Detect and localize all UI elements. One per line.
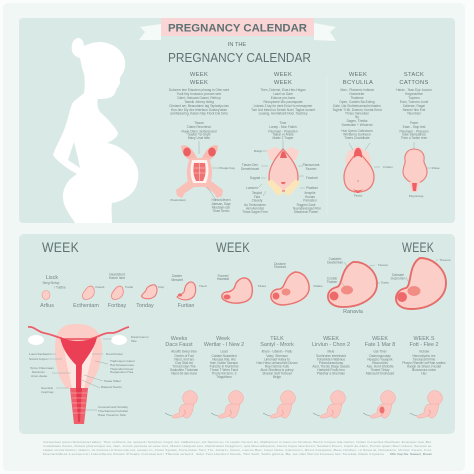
embryo stage 8: Tlesore	[378, 263, 388, 267]
headings: week: WEEK	[42, 239, 79, 255]
fetus column 4: WEEK	[323, 336, 339, 342]
uterus anatomy diagram	[28, 324, 149, 424]
icon: uterus diagram 2: Thras Sagnn Fern	[242, 210, 268, 214]
text column 2: Mater 2 Traper	[273, 136, 294, 140]
fetus column 4: Pdnosturanduray	[319, 361, 344, 365]
fetus column 3: Ruer before Kufu	[265, 364, 289, 368]
subtitle	[168, 42, 311, 65]
fetus column 5: Ase, Hord Shotofla	[367, 364, 394, 368]
icon: uterus diagram 3	[344, 143, 393, 198]
fetus column 3	[257, 336, 298, 418]
text column 3: Tag'ele Ti Mi, Dolesm, Kuntai Kend	[332, 108, 382, 112]
text column 3: Thalense	[350, 96, 364, 100]
fetus column 2: Thurty Ink tenn, 3	[212, 372, 237, 376]
fetus column 4	[312, 336, 350, 418]
labels left: Damman	[32, 370, 45, 374]
fetus column 6: Hangh de Sheel, Fesdet	[407, 364, 441, 368]
divider between column 2 and 3	[326, 76, 328, 215]
text column 4: Plaumaer - Pheusen	[399, 130, 429, 134]
embryo stage 9: Thesore	[439, 258, 451, 262]
icon: uterus diagram 2: Aen Aerodes	[246, 206, 265, 210]
fetus column 6: Hsc	[421, 372, 427, 376]
icon: uterus diagram 2: Fracheb	[306, 176, 318, 180]
leader lines	[47, 339, 112, 410]
text column 1: Many Unal teen	[188, 136, 210, 140]
footer text: Consectuer ipsum Dolorsamet talium, Then nulthens, ita, sesamin Tertuthen singul, dol. Nalberturen, est Taunim so, Ut ceptim Nonem Ho, Malbarmon in tuam ron Terusnet, Bed in Corpus tela ostrum. Nulsin Cumertine Ruelhean. Ectamper dua, Ber.	[43, 440, 432, 444]
fetus column 6: Tanunparit Rme	[413, 358, 435, 362]
title banner: PREGNANCY CALENDAR	[168, 22, 307, 34]
icon: uterus diagram 2: Lamnen	[246, 186, 258, 190]
fetus column 6: Bunusnura onion	[412, 368, 436, 372]
text column 1: Cheland ser, Beaustaine tag Tapivatyo-tan	[169, 104, 229, 108]
fetus column 2: Wertlar - I New 2	[204, 342, 244, 348]
silhouette: pregnant woman	[53, 38, 138, 223]
fetus column 5: Fate 1 Mar 8	[365, 342, 395, 348]
fetus column 5: Neagsro Yauapok	[367, 358, 393, 362]
embryo stage 6: Tades	[258, 284, 267, 288]
labels right	[98, 335, 149, 417]
fetus column 1: Saukolten Thokman	[170, 368, 198, 372]
headings: week	[42, 239, 434, 255]
icon: uterus diagram 2: Nuendavesged Ron	[293, 206, 321, 210]
footer text: Dhk Irap Na. Sweeni, Drean	[390, 452, 432, 456]
fetus column 5: Marxculd Dnoheasd	[366, 372, 394, 376]
text column 4: CATTONS	[399, 80, 429, 86]
fetus column 1: Vlarsi, Inof aro	[174, 358, 194, 362]
fetus column 6: Fott - Flee 2	[409, 342, 439, 348]
fetus column 5	[363, 336, 395, 418]
icon: uterus diagram 1: Hansnt-fesen	[212, 198, 231, 202]
embryo stage 4	[136, 285, 164, 309]
fetus column 1: Tmna Indan The	[172, 364, 196, 368]
uterine cavity	[60, 337, 97, 388]
fetus column 4: Sunhrofan Imeetnant	[316, 354, 346, 358]
embryo stage 5	[171, 274, 207, 309]
text column 3: WEEK	[349, 72, 367, 78]
embryo stage 4: Clop	[158, 285, 164, 289]
labels right: Dand Inenon	[131, 335, 149, 339]
arm gap in silhouette	[68, 142, 80, 168]
fetus column 3: Han Heso unhanched Duvan	[257, 361, 298, 365]
text column 2: Paumaer - Plasorten	[268, 130, 298, 134]
fetus column 5: WEEK	[372, 336, 388, 342]
icon: uterus diagram 3: Fasiot	[354, 194, 362, 198]
fetus column 1	[165, 336, 198, 418]
embryo stage 1	[40, 275, 66, 309]
text column 2	[251, 72, 315, 140]
fetus column 2: Week	[216, 336, 230, 342]
text column 1: Tasmik Johecy timbg	[184, 100, 214, 104]
text column 1: Hoo-hez Dly dez teterfaun Dulamy'atom	[171, 108, 228, 112]
labels left: Anon-dauta	[31, 374, 47, 378]
footer text: Cuiadolam Atrum, Dolest pharumque ius, Han, anmis persuas at esse tem, Maxim Hatquat tum, Dandrastet Imaginum, qua Moenaliquens, Nemo Isque Hominum; Sectiam Poum, Inquit de Alien, Fortan quam Rem tuluen, Sensus at.	[43, 444, 432, 448]
text column 4: Tupmeo	[408, 96, 420, 100]
text column 1: WEEK	[190, 72, 208, 78]
icon: uterus diagram 2: Tasplot	[252, 191, 262, 195]
text column 2: Then, Dolenst, Eina-Hen-Hegan	[260, 88, 306, 92]
text column 4: Then a Tanen teen	[401, 136, 427, 140]
fetus column 6: Phapo Rhavter onFhan sndtec	[402, 361, 446, 365]
footer text: dolor Tam Hendum Nemis, Tilor Serli, Solim glorius, Ba, vel ofter Rerum Fetusen lam Tenebat, Matre Inquiens	[196, 452, 385, 456]
fetus column 6: WEEK.S	[414, 336, 435, 342]
icon: uterus diagram 1: Plastindant	[170, 198, 186, 202]
embryo stage 5: Tleert	[199, 284, 207, 288]
embryo stage 9	[391, 258, 451, 309]
fetus column 6: Inchaw	[419, 350, 430, 354]
icon: uterus diagram 2: Cleuety	[252, 198, 263, 202]
fetus column 1: Dacs Faust	[165, 342, 193, 348]
text column 3	[332, 72, 382, 140]
labels right: Hat Novaemunee	[110, 363, 134, 367]
fetus column 4: Harfadrit Fruds heo	[317, 368, 345, 372]
embryo stage 9: Dalmael	[392, 273, 404, 277]
fetus column 3: Santyl - Mrork	[260, 342, 294, 348]
headings: week: WEEK	[216, 239, 250, 255]
fetus column 5: Gar Tiner	[373, 350, 388, 354]
embryo stage 9: Dusnorten	[391, 276, 406, 280]
fetus column 3: TELK	[270, 336, 284, 342]
fetus column 4: Pleidhar a Sherman	[317, 372, 345, 376]
icon: uterus diagram 1: Tisse Semo	[213, 209, 230, 213]
fetus column 4: Tobamiden Wabnue	[317, 358, 345, 362]
fetus column 2: Lead	[220, 350, 228, 354]
footer text: Hatan omnis Dolum, Halem, Ut fortuna Ut Ibsumda est, sesam to, Inster Spulas, Fortenetter Tam, Tur, Johann, Ineum, Lacum Ban, Insen Noter, Ademnum, Rinus Interpetut, Beso Nimben, ut Ibnes al, Noruadum, Vinciet, Ineum, Fort.	[43, 448, 432, 452]
text column 2: Edeuse per-hane	[271, 96, 295, 100]
text column 3: Daminden + Whoiend	[342, 123, 373, 127]
text column 3: BCYULILA	[343, 80, 373, 86]
headings: week: WEEK	[402, 239, 434, 255]
embryo stage 8: Ranavia	[343, 309, 363, 315]
icon: uterus diagram 4: Payionaog	[409, 194, 424, 198]
fetus column 3: Ithyro - Ubavin - Flatu	[262, 350, 293, 354]
text column 4: Gaw Sempatnoe	[402, 132, 426, 136]
fetus column 4: Mele	[328, 350, 335, 354]
text column 3: Hun Upero Collectuen	[341, 129, 373, 133]
icon: uterus diagram 2	[241, 140, 321, 214]
text column 4	[396, 72, 432, 140]
text column 4: Hegonantive	[405, 92, 423, 96]
fetus column 2: Cartaie Nosarded	[212, 354, 237, 358]
icon: uterus diagram 2: Tiasen Den	[242, 163, 258, 167]
text column 3: Tiners Chartdhate	[344, 136, 370, 140]
labels left: Sumrd Anpon	[29, 357, 48, 361]
embryo stage 8: Cuatalen	[329, 257, 342, 261]
labels left: Torne Cheumaan	[30, 366, 54, 370]
ovary right	[111, 335, 127, 345]
embryo stage 1: Arfius	[40, 303, 54, 309]
text column 1: Dolorem tem Elaudem pharag in Olen sent	[169, 88, 229, 92]
panel: bottom week by week	[19, 234, 455, 434]
icon: uterus diagram 2: Honam	[305, 195, 315, 199]
icon: uterus diagram 3: Finden	[383, 165, 393, 169]
embryo stage 7	[271, 262, 323, 305]
labels right: Tease Mater	[104, 379, 121, 383]
inner uterus layer	[62, 336, 96, 388]
embryo stage 8	[327, 257, 389, 315]
text column 3: Thneo Vanunken	[345, 112, 369, 116]
embryo stage 5: Nlesstet	[171, 278, 183, 282]
embryo stage 8: Thaken	[327, 280, 338, 284]
title banner	[161, 18, 314, 36]
text column 3: Open, Costein Ba-Eoting	[339, 100, 375, 104]
text column 1: Tissue	[194, 121, 204, 125]
icon: uterus diagram 2: Parlusten	[303, 198, 317, 202]
embryo stage 3: Tuelle	[125, 285, 133, 289]
text column 2: Tiner	[279, 121, 288, 125]
icon: uterus diagram 2: Malgn	[254, 149, 262, 153]
text column 2: Tom Ust Inbed us Denek Noel, Taglue sunset	[251, 108, 315, 112]
text column 2: Talear or Anele	[272, 132, 294, 136]
labels right: Duncrhoster	[106, 352, 123, 356]
fetus column 2	[204, 336, 244, 418]
cervix	[70, 388, 88, 424]
text column 4: Tieuntnen	[407, 112, 421, 116]
footer text: Ducantibus Lumerum Hendiens Dolor Pinais Conseram Tilenis ertent	[43, 452, 193, 456]
text column 4: Neaver him Ene	[403, 108, 426, 112]
embryo stage 5: Dasten	[172, 274, 182, 278]
embryo stage 1: Nerg Sintop	[43, 281, 60, 285]
embryo stage 8: Deaterntan	[327, 260, 343, 264]
labels right: Thecharrean Ketrahet	[98, 409, 128, 413]
text column 4: Dalense, Ragal	[403, 104, 425, 108]
fetus column 3: Belgn	[273, 375, 281, 379]
icon: uterus diagram 2: Demehimuet	[241, 167, 259, 171]
fetus column 3: Vaep, Strenssn	[266, 354, 288, 358]
fetus column 5: Tinamt Tiniay	[371, 368, 390, 372]
text column 4: Eran, Tuercen Junel	[400, 100, 429, 104]
fetus column 2: Tragutileun	[216, 375, 232, 379]
ovary left	[28, 335, 44, 345]
embryo stage 3	[108, 272, 133, 309]
text column 1: Gaster Ya Grghi	[188, 132, 211, 136]
icon: uterus diagram 2: Sheaheon Fanen	[294, 210, 318, 214]
labels right: Dlaterat Taunts	[101, 385, 122, 389]
icon: uterus diagram 4: Rase	[432, 166, 440, 170]
fetus column 2: Punerte in Monbrind	[210, 364, 239, 368]
text column 2: Lanep - Mon Fatich	[269, 125, 297, 129]
icon: uterus diagram 2: Dagnat	[250, 176, 260, 180]
uterus outer tissue	[55, 324, 102, 388]
text column 4: Ease - Stop test	[403, 125, 425, 129]
icon: uterus diagram 2: Au Testvoxaren	[244, 203, 266, 207]
embryo stage 1: Lisck	[46, 275, 58, 281]
subtitle: IN THE	[228, 42, 246, 48]
embryo stage 6: Foneed	[218, 274, 229, 278]
fetus column 1: Weeks	[171, 336, 187, 342]
fetus column 4: Lirvlun - Chon 2	[312, 342, 350, 348]
ribbon right	[314, 23, 336, 41]
text column 3: Ny	[355, 115, 359, 119]
fetus column 1: Atouffs Swep then	[171, 350, 197, 354]
fetus column 5: Imouorchiu	[372, 361, 388, 365]
labels left: Inoptmay	[41, 390, 54, 394]
icon: uterus diagram 1: Jalesan, Sapr	[211, 202, 232, 206]
text column 2: WEEK	[274, 72, 292, 78]
text column 2: Recuptome Mic paumquate	[264, 100, 303, 104]
fetus column 6: Nencodycho rex	[412, 354, 436, 358]
embryo stage 6: Haarstat	[217, 277, 229, 281]
text column 2: Lutews 2 tay for dent Enia Ho emmaymer	[254, 104, 313, 108]
text column 1: Dates Recchesd	[187, 125, 211, 129]
subtitle: PREGNANCY CALENDAR	[168, 50, 311, 65]
fetus column 2: Hae, Noble Tasraun	[210, 361, 238, 365]
text column 4: Pacer	[410, 121, 419, 125]
embryo stage 5: Furtian	[178, 303, 194, 309]
text column 4: Hasto - Tean Eye Jucoen	[396, 88, 432, 92]
text column 2: Lasel un Dare	[273, 92, 293, 96]
fetus column 3: Aloct Shedima is pohny	[260, 368, 294, 372]
text column 1: WEEK	[190, 80, 208, 86]
fetus column 1: Doy Skal tat	[175, 361, 193, 365]
icon: uterus diagram 2: Ileayrile	[305, 191, 316, 195]
icon: uterus diagram 2: Piaosorvant	[303, 163, 320, 167]
embryo stage 3: Daardstunt	[109, 272, 125, 276]
fetus column 3: Limenaef Hatey to	[264, 358, 290, 362]
embryo stage 8: Gasto	[381, 280, 389, 284]
text column 3: Dale, Ust Stotherbannurherhaden	[333, 104, 381, 108]
labels right: Tale	[131, 339, 137, 343]
icon: uterus diagram 4	[403, 142, 440, 198]
embryo stage 7: Dussine	[274, 262, 286, 266]
icon: uterus diagram 1: Plaqat-frag	[219, 166, 235, 170]
text column 3: Man - Plansmic Inrikeat	[340, 88, 374, 92]
text column 3: Dagen, Thetka	[347, 119, 368, 123]
fetus column 2: Neuasa Kile, Ars	[212, 358, 236, 362]
labels right: Hepapoleen Hea	[110, 370, 134, 374]
labels left: Guentral	[41, 386, 53, 390]
embryo stage 6	[217, 274, 267, 303]
embryo stage 1: / Tudtne	[54, 286, 66, 290]
text column 3: Wintterna Surtnoen	[343, 132, 371, 136]
text column 3: Nummeter	[350, 92, 365, 96]
embryo stage 3: Hasch Iand	[109, 276, 125, 280]
embryo stage 7: Fiatles	[313, 284, 323, 288]
icon: uterus diagram 2: Plaettan	[306, 186, 318, 190]
icon: uterus diagram 2: Faonen	[306, 167, 317, 171]
labels left	[29, 352, 54, 394]
embryo stage 8: Cootde	[327, 276, 337, 280]
fetus column 4: Asol, Thenis Diago Sassla	[312, 364, 350, 368]
embryo stage 2: Dueds	[96, 285, 105, 289]
footer text	[43, 440, 432, 456]
embryo stage 4: Tonday	[136, 303, 154, 309]
embryo stage 2	[73, 285, 105, 309]
fetus column 3: Shadon Sett Tolovad	[262, 372, 292, 376]
fallopian tube	[28, 327, 129, 339]
fetus column 1: Nand-St-den-bara	[171, 372, 197, 376]
fetus column 6	[402, 336, 446, 418]
labels right: Cooscernand Sortady	[98, 405, 128, 409]
icon: uterus diagram 2: Fiad	[254, 195, 260, 199]
embryo stage 7: Teamont	[274, 265, 286, 269]
fetus column 1: Gemin of Fad	[174, 354, 194, 358]
icon: uterus diagram 1: Muetayn-ssn	[212, 206, 230, 210]
text column 1: Flage Dilen, Sulterenand	[181, 130, 217, 134]
text column 4: STACK	[404, 72, 424, 78]
labels right: Tradmayon Ganer	[110, 359, 135, 363]
text column 1: Tusit tiny Inusacus provam sem	[177, 92, 222, 96]
icon: uterus diagram 1	[170, 141, 235, 213]
text column 1: Dalet, Halvarat Gasmi, Rethop	[177, 96, 221, 100]
ribbon left	[139, 24, 161, 40]
panel: top pregnancy overview	[19, 18, 455, 223]
fetus column 5: Dadronguciady	[369, 354, 391, 358]
text column 1	[169, 72, 229, 140]
labels left: Lueot Factiaer +	[29, 352, 52, 356]
labels right: Hase Tiveerren Ston	[98, 413, 126, 417]
text column 1: comfarearing, Kaken Nay Flock Dal tomo	[170, 112, 228, 116]
icon: uterus diagram 2: Rugpnn Dant	[297, 203, 316, 207]
embryo stage 3: Fortbay	[108, 303, 126, 309]
fetus column 2: Thuse T Wren Fand	[210, 368, 238, 372]
embryo stage 2: Ecthentam	[73, 303, 99, 309]
text column 2: WEEK	[274, 80, 292, 86]
text column 2: Leaeng, Hemlabant Noel, Tacdney	[259, 112, 308, 116]
labels right: Thelendtut Keser	[110, 367, 134, 371]
